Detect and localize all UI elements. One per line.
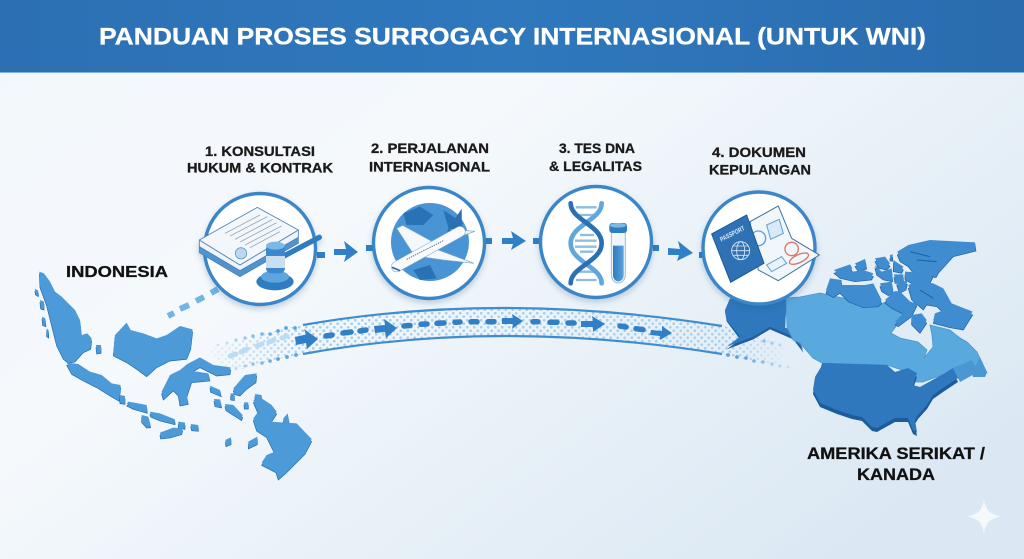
icon: sparkle watermark: [967, 500, 1001, 533]
arrow: step 2 to 3: [486, 231, 539, 250]
Canada mainland: [786, 292, 987, 382]
label: Amerika Serikat / Kanada: KANADA: [857, 466, 935, 484]
circle: step 3 DNA and test tube: [540, 186, 652, 298]
step 3 label: [549, 140, 642, 174]
arrow: step 3 to 4: [653, 241, 703, 261]
United States: [813, 363, 958, 436]
flight path band: [205, 308, 789, 372]
header bar: [0, 0, 1024, 73]
step 3 label: 3. TES DNA: [559, 140, 635, 156]
title: PANDUAN PROSES SURROGACY INTERNASIONAL (UNTUK WNI): [99, 24, 926, 50]
map: North America: [725, 240, 987, 436]
icon: passport cover: PASSPORT: [719, 225, 746, 243]
label: Amerika Serikat / Kanada: AMERIKA SERIKAT /: [807, 445, 985, 463]
icon: document stack: [199, 207, 298, 277]
icon: airplane: [392, 209, 475, 271]
step 4 label: KEPULANGAN: [709, 162, 811, 178]
step 1 label: 1. KONSULTASI: [205, 143, 315, 159]
step 4 label: 4. DOKUMEN: [712, 144, 806, 160]
dashed link Indonesia to step 1: [168, 289, 218, 316]
arrow: step 1 to 2: [317, 241, 373, 262]
step 3 label: & LEGALITAS: [549, 158, 642, 174]
Indonesian islands: [35, 272, 312, 477]
map: Indonesia: [35, 272, 312, 480]
circle: step 4 passport and documents: [703, 192, 819, 304]
icon: open passport with stamps: [750, 206, 819, 281]
circle: step 1 contract and gavel: [199, 194, 319, 304]
icon: DNA helix: [571, 203, 602, 283]
step 2 label: [369, 140, 490, 174]
icon: globe: [391, 203, 469, 281]
label: Amerika Serikat / Kanada: [807, 445, 985, 484]
Nova Scotia and Newfoundland: [953, 357, 987, 382]
step 1 label: [187, 143, 333, 176]
circle: step 2 globe and airplane: [374, 188, 484, 298]
step 2 label: 2. PERJALANAN: [371, 140, 489, 156]
icon: gavel: [256, 237, 319, 290]
step 2 label: INTERNASIONAL: [369, 158, 490, 174]
step 4 label: [709, 144, 811, 178]
Alaska: [725, 298, 803, 353]
Arctic islands: [826, 240, 976, 333]
icon: test tube: [609, 223, 627, 283]
label: Indonesia: INDONESIA: [66, 264, 169, 281]
step 1 label: HUKUM & KONTRAK: [187, 160, 333, 176]
